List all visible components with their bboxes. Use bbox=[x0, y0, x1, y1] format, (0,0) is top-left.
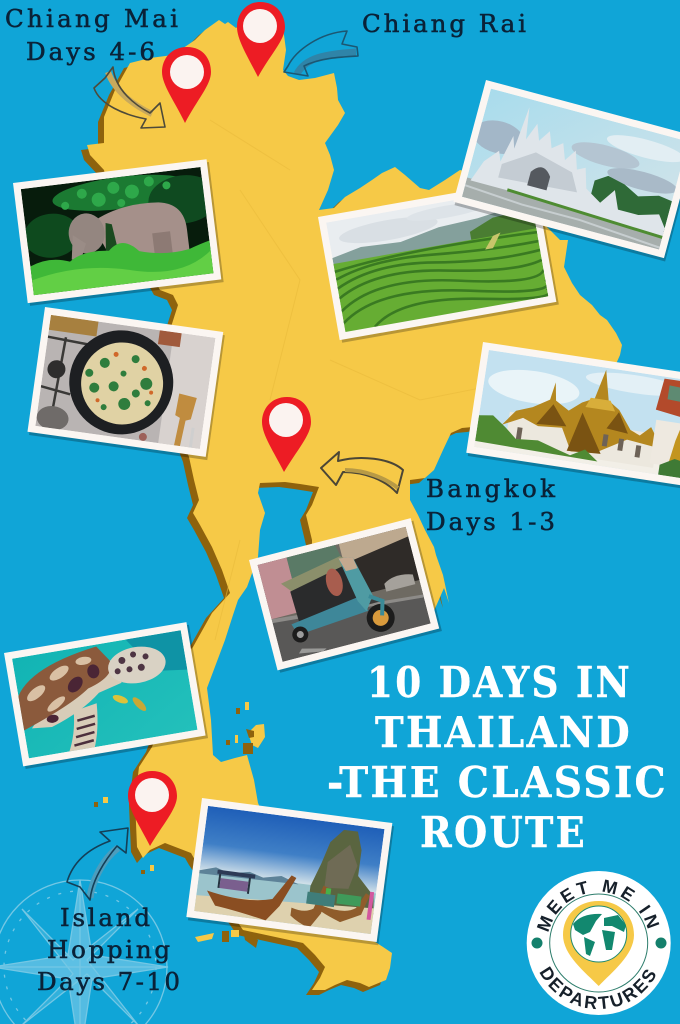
tuk-tuk vehicle bbox=[281, 556, 395, 642]
title: THAILAND bbox=[375, 708, 632, 757]
title bbox=[327, 658, 668, 857]
photo: tuk-tuk bbox=[249, 518, 442, 673]
photo: tea plantation bbox=[318, 178, 559, 343]
label: Days 7-10: Days 7-10 bbox=[37, 967, 180, 996]
paper creases bbox=[210, 120, 520, 640]
logo text: MEET ME IN bbox=[536, 880, 660, 932]
logo pin bbox=[563, 901, 634, 986]
photo: longtail boats at beach bbox=[186, 798, 394, 945]
label: Chiang Mai: Chiang Mai bbox=[5, 4, 178, 33]
photo: noodle pan on stove bbox=[27, 307, 225, 460]
compass rose bbox=[0, 880, 168, 1024]
arrow band bbox=[297, 52, 356, 74]
pin: islands bbox=[128, 771, 177, 846]
label: Bangkok: Bangkok bbox=[426, 474, 556, 503]
palace walls bbox=[505, 412, 658, 468]
palace roofs bbox=[502, 370, 654, 453]
arrow: to Bangkok bbox=[321, 452, 403, 493]
arrow: to Chiang Mai bbox=[94, 67, 165, 128]
map of Thailand bbox=[81, 20, 622, 995]
label: Hopping: Hopping bbox=[47, 935, 170, 964]
elephant bbox=[68, 202, 190, 260]
temple bbox=[470, 108, 664, 236]
label: Days 4-6: Days 4-6 bbox=[26, 37, 155, 66]
arrow: to Chiang Rai bbox=[284, 31, 358, 76]
limestone rock bbox=[310, 830, 374, 914]
arrow band bbox=[108, 72, 152, 114]
arrow band bbox=[90, 848, 118, 898]
turtle bbox=[18, 646, 166, 752]
logo globe bbox=[571, 906, 627, 962]
label: Days 1-3: Days 1-3 bbox=[426, 507, 555, 536]
label: Chiang Rai: Chiang Rai bbox=[362, 9, 526, 38]
boats bbox=[207, 870, 374, 926]
map shadow bbox=[81, 25, 616, 995]
photo: elephant bbox=[13, 158, 229, 306]
map land bbox=[87, 20, 622, 990]
arrow: to islands bbox=[67, 828, 128, 900]
logo: Meet Me In Departures bbox=[526, 871, 671, 1015]
bushes bbox=[475, 413, 602, 461]
photo: grand palace bbox=[466, 342, 680, 492]
title: 10 DAYS IN bbox=[367, 658, 632, 707]
pin: Chiang Rai bbox=[237, 2, 285, 77]
arrow band bbox=[345, 470, 398, 488]
pan bbox=[69, 330, 174, 434]
photo: white temple bbox=[453, 80, 680, 262]
pin: Bangkok bbox=[262, 397, 311, 472]
right tower bbox=[652, 420, 680, 460]
trees bbox=[591, 176, 672, 232]
label: Island: Island bbox=[60, 903, 150, 932]
title: ROUTE bbox=[420, 808, 587, 857]
photo: sea turtle bbox=[4, 622, 208, 769]
logo: Meet Me In Departures: DEPARTURES bbox=[540, 966, 656, 1010]
islands bbox=[94, 702, 265, 948]
pin: Chiang Mai bbox=[162, 47, 211, 123]
spatula bbox=[174, 394, 197, 446]
